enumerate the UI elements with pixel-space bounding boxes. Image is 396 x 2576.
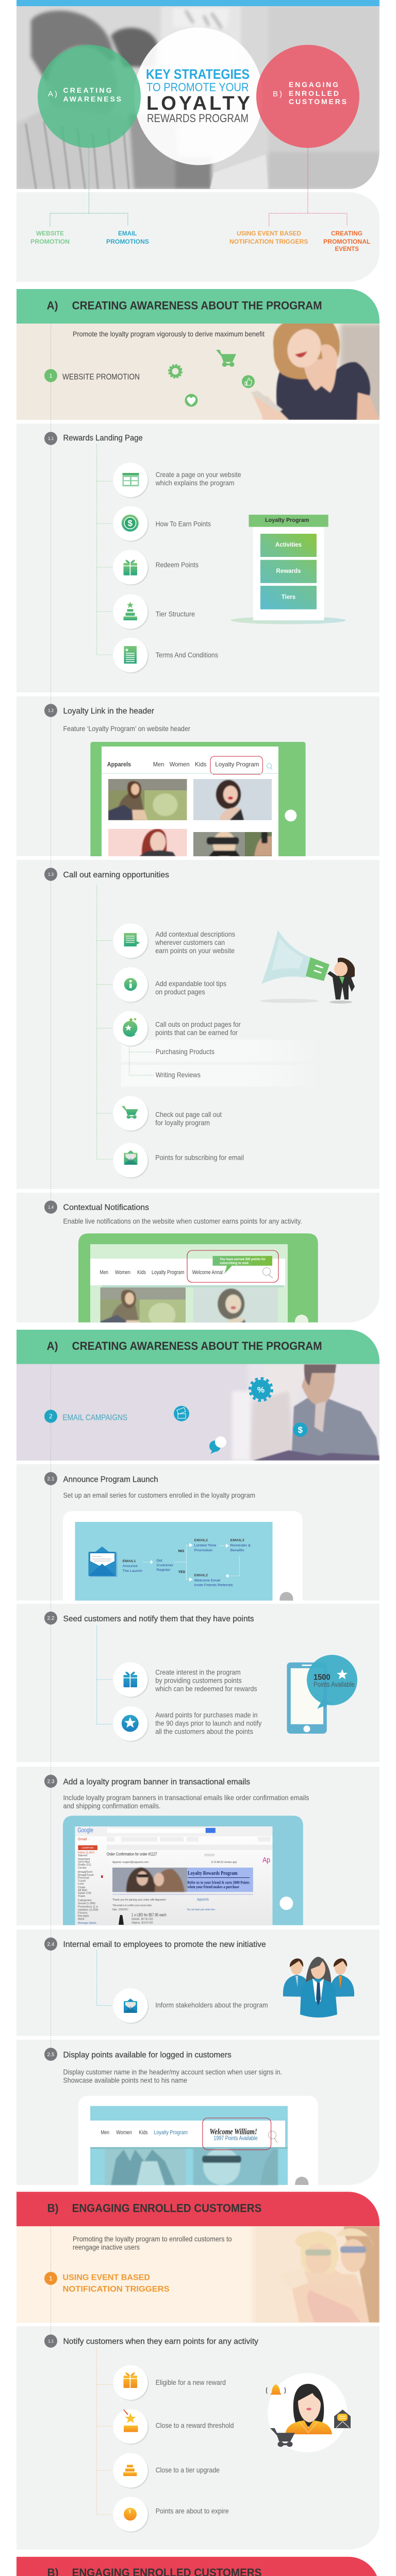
- gmail sidebar: Important: [78, 1858, 90, 1861]
- panel: 2.5 display points: [16, 2040, 380, 2185]
- flow step: email 2 promotion: EMAIL2: [194, 1539, 208, 1543]
- nav bar: Men: [100, 1269, 108, 1276]
- flow step: email 1: [123, 1560, 142, 1573]
- flow step: did customer register: Did: [157, 1559, 162, 1563]
- gmail sidebar: Personal: [78, 1877, 89, 1880]
- marker: 2 email campaigns: 2: [49, 1413, 53, 1420]
- item: check out: [113, 1096, 222, 1131]
- text: promote vigorously: Promote the loyalty program vigorously to derive maximum benefit: [73, 330, 265, 338]
- gmail sidebar: Work: [78, 1918, 85, 1921]
- flow step: email 1: Anounce: [123, 1565, 138, 1568]
- email body: 1 x LBD for $57.95 each: [131, 1912, 167, 1917]
- marker: 2.2: 2.2: [47, 1616, 55, 1621]
- loyalty banner: [112, 1868, 253, 1895]
- tablet mockup: gmail: COMPOSE: [81, 1846, 94, 1849]
- marker: 1.2: [44, 704, 57, 717]
- title: LOYALTY: [146, 93, 250, 114]
- item: tier upgrade: [113, 2453, 220, 2488]
- email body: This email is to confirm your recent order.: [112, 1904, 152, 1907]
- flow step: email 1: EMAIL1: [123, 1560, 136, 1563]
- icon: cart: [216, 350, 236, 367]
- gmail sidebar: Circles: [78, 1867, 87, 1870]
- flow step: email 2 promotion: [194, 1539, 217, 1552]
- loyalty banner: Loyalty Rewards Program: [188, 1871, 238, 1876]
- photo: man at desk: [232, 1364, 380, 1461]
- sub-item bands: [121, 1040, 320, 1087]
- flow labels: no / yes: NO: [178, 1550, 184, 1553]
- description: [63, 1793, 309, 1810]
- gmail sidebar: Starred: [78, 1854, 87, 1857]
- section header: A creating awareness (email): A): [47, 1340, 58, 1352]
- item: create a page: which explains the program: [155, 479, 234, 487]
- description: Promoting the loyalty program to enrolled customers to: [73, 2235, 232, 2243]
- illustration: phone with points bubble: [287, 1655, 357, 1734]
- panel: hero: [16, 6, 380, 189]
- email body: Shipping : $10.00 USD: [131, 1921, 153, 1924]
- flow step: email 2 welcome: [194, 1573, 233, 1587]
- item: call outs: Call outs on product pages for: [155, 1020, 241, 1028]
- label: website promotion: PROMOTION: [30, 238, 70, 245]
- item: tool tips: Add expandable tool tips: [155, 979, 226, 988]
- flow step: email 1: The Launch: [123, 1569, 142, 1573]
- illustration: woman with notifications: [266, 2373, 351, 2452]
- panel: 2.4 internal email: [16, 1929, 380, 2036]
- notification bubble: [187, 1250, 278, 1282]
- label: creating promotional events: PROMOTIONAL: [323, 238, 370, 245]
- hero photo: couple in grayscale: [16, 6, 380, 189]
- title: [146, 66, 250, 125]
- nav bar: Apparels: [107, 761, 131, 768]
- photo: woman with phone: [251, 324, 380, 420]
- envelope: [334, 2410, 351, 2428]
- gmail sidebar: Spam (19): [78, 1892, 91, 1895]
- flow step: email 3: Benefits: [230, 1549, 244, 1552]
- gmail sidebar: [78, 1851, 98, 1925]
- heading: Seed customers and notify them that they have points: [63, 1615, 254, 1623]
- marker: 2.4: 2.4: [47, 1942, 55, 1947]
- label: event based triggers: USING EVENT BASED: [237, 230, 301, 237]
- title: REWARDS PROGRAM: [147, 112, 249, 125]
- marker: 1.1 notify: [44, 2334, 57, 2348]
- gmail sidebar: [Imap]/Trash: [78, 1874, 94, 1877]
- loyalty banner: Refer us to your friend & earn 2000 Points: [187, 1880, 250, 1885]
- nav bar: [102, 756, 278, 774]
- description: and shipping confirmation emails.: [63, 1802, 161, 1810]
- notification bubble: You have earned 200 points for: [220, 1258, 266, 1261]
- label: event based triggers: [229, 230, 308, 245]
- item: create interest: Create interest in the program: [155, 1668, 241, 1676]
- connector tree: [97, 444, 112, 655]
- illustration: phone with points bubble: Points Available: [314, 1680, 355, 1688]
- item: award points: the 90 days prior to launch and notify: [155, 1719, 261, 1727]
- section header: A creating awareness: A): [47, 299, 58, 312]
- flow step: email 2 welcome: EMAIL2: [194, 1573, 208, 1577]
- item: redeem points: [113, 550, 199, 585]
- gmail sidebar: All Mail: [78, 1889, 87, 1892]
- heading: Announce Program Launch: [63, 1476, 158, 1484]
- top blue band: [16, 0, 380, 6]
- marker: 1.2: 1.2: [48, 708, 54, 713]
- item: reward threshold: [113, 2409, 234, 2445]
- red circle: engaging enrolled customers: ENGAGING: [289, 80, 338, 89]
- nav bar: [100, 1267, 273, 1278]
- icon: percent burst: [250, 1379, 272, 1400]
- welcome callout: 1997 Points Available: [213, 2136, 258, 2142]
- marker: 2.4: [44, 1938, 57, 1951]
- gmail sidebar: [Imap]/Sent: [78, 1871, 93, 1874]
- description: Set up an email series for customers enrolled in the loyalty program: [63, 1491, 255, 1499]
- gmail sidebar: Travel: [78, 1880, 86, 1883]
- email body: Apparels: [197, 1898, 209, 1902]
- tablet mockup: [90, 742, 306, 858]
- green circle: creating awareness: [38, 45, 141, 148]
- heading: Loyalty Link in the header: [63, 707, 155, 716]
- gmail sidebar: Less: [78, 1883, 84, 1886]
- marker: 2.2: [44, 1612, 57, 1624]
- panel: 1.3 call out earning opportunities: [16, 860, 380, 1189]
- item: create interest: by providing customers points: [155, 1676, 242, 1685]
- heading: Rewards Landing Page: [63, 434, 143, 443]
- tablet mockup: [78, 1233, 318, 1331]
- card: loyalty program mockup: Rewards: [276, 568, 301, 574]
- marker: 2.5: 2.5: [47, 2052, 55, 2058]
- email body: Subtotal : $57.95 USD: [131, 1918, 153, 1921]
- tablet mockup: gmail: Google: [77, 1826, 93, 1834]
- item: how to earn points: [113, 506, 211, 542]
- welcome callout: [203, 2118, 271, 2150]
- red circle: engaging enrolled customers: ENROLLED: [289, 89, 339, 97]
- item: contextual descriptions: Add contextual descriptions: [155, 930, 235, 938]
- description: Enable live notifications on the website when customer earns points for any activity.: [63, 1217, 302, 1225]
- connector: [97, 1950, 112, 2006]
- nav bar: Loyalty Program: [215, 761, 259, 768]
- section header: B engaging enrolled customers (events): [16, 2557, 380, 2576]
- marker: 1.1: [44, 432, 57, 445]
- timeline: [51, 324, 52, 2576]
- flow step: email 2 welcome: Welcome Email: [194, 1579, 221, 1582]
- flow step: email 2 promotion: Promotion: [194, 1549, 212, 1552]
- item: create a page: [113, 463, 241, 498]
- item: call outs: points that can be earned for: [155, 1028, 238, 1037]
- nav bar: Women: [170, 761, 190, 768]
- item: how to earn points: $: [128, 518, 133, 528]
- section header: B engaging enrolled customers: [16, 2192, 380, 2226]
- gmail sidebar: Promotions (1,4: [78, 1906, 98, 1909]
- sub-item: writing reviews: Writing Reviews: [156, 1071, 201, 1079]
- item: check out: for loyalty program: [155, 1118, 210, 1127]
- envelope: [89, 1547, 118, 1577]
- label: website promotion: WEBSITE: [36, 230, 64, 237]
- nav bar: Men: [153, 761, 164, 768]
- label: event based triggers: NOTIFICATION TRIGGERS: [229, 238, 308, 245]
- section header: A creating awareness: [16, 289, 380, 324]
- label: email promotions: [106, 230, 149, 245]
- marker: 1.4: [44, 1200, 57, 1214]
- nav bar: Men: [101, 2129, 109, 2136]
- illustration: phone with points bubble: 1500: [314, 1673, 331, 1682]
- card: loyalty program mockup: Activities: [275, 542, 302, 548]
- icon: cards: [174, 1406, 189, 1421]
- heading: event based triggers: NOTIFICATION TRIGGERS: [63, 2285, 170, 2294]
- nav bar: Women: [115, 1269, 130, 1276]
- flow step: email 3: EMAIL3: [230, 1539, 244, 1543]
- tablet mockup: gmail: [63, 1816, 303, 1925]
- nav bar: Kids: [137, 1269, 146, 1276]
- flow step: did customer register: [157, 1559, 174, 1572]
- tablet mockup: email flow: [63, 1511, 303, 1601]
- connector tree: [97, 1625, 112, 1724]
- panel: 2.3 transactional email banner: [16, 1767, 380, 1925]
- marker: 2.3: [44, 1775, 57, 1788]
- icon: dollar: $: [298, 1425, 303, 1435]
- gmail sidebar: Chats: [78, 1886, 86, 1889]
- flow step: email 2 promotion: Limited Time: [194, 1544, 217, 1548]
- marker: 1 event triggers: 1: [49, 2275, 53, 2282]
- item: subscribing: Points for subscribing for email: [155, 1154, 244, 1162]
- heading: event based triggers: USING EVENT BASED: [63, 2274, 150, 2282]
- nav bar: Kids: [195, 761, 207, 768]
- item: inform stakeholders: [113, 1988, 268, 2024]
- label: creating promotional events: [323, 230, 370, 252]
- section header: A creating awareness: CREATING AWARENESS ABOUT THE PROGRAM: [72, 299, 322, 312]
- connector: engaging branches: [269, 148, 347, 226]
- description: reengage inactive users: [73, 2243, 140, 2251]
- green circle: creating awareness: AWARENESS: [63, 95, 121, 103]
- heading: Contextual Notifications: [63, 1204, 149, 1212]
- item: create a page: Create a page on your website: [156, 470, 241, 479]
- email body: [107, 1852, 270, 1925]
- flow arrows: [143, 1543, 239, 1582]
- nav bar: Welcome Anna!: [192, 1269, 223, 1276]
- nav bar: Kids: [139, 2129, 148, 2136]
- sub-item: purchasing products: Purchasing Products: [156, 1047, 214, 1056]
- green circle: creating awareness: A): [48, 90, 57, 98]
- gmail sidebar: Receipts: [78, 1915, 89, 1918]
- section header: A creating awareness (email): CREATING AWARENESS ABOUT THE PROGRAM: [72, 1340, 322, 1352]
- marker: 2.3: 2.3: [47, 1779, 55, 1785]
- description: Feature ‘Loyalty Program’ on website header: [63, 724, 190, 733]
- panel: 1.1 notify customers: [16, 2326, 380, 2550]
- icon: thumbs up: [242, 375, 255, 388]
- email body: Thank you for placing your order with Apparels!: [112, 1899, 166, 1902]
- marker: 1.1 notify: 1.1: [48, 2339, 54, 2344]
- marker: 1 website promotion: 1: [49, 373, 53, 379]
- tablet mockup: points display: [78, 2096, 318, 2185]
- item: eligible: Eligible for a new reward: [156, 2378, 226, 2386]
- item: tier structure: [113, 595, 195, 630]
- icon: chat bubbles: [209, 1436, 226, 1454]
- cart: [270, 2428, 295, 2447]
- item: expire: [113, 2497, 229, 2533]
- gmail sidebar: Manage labels: [78, 1922, 96, 1925]
- item: contextual descriptions: earn points on your website: [155, 946, 235, 955]
- flow labels: no / yes: [178, 1550, 186, 1574]
- illustration: three colleagues: [283, 1957, 354, 2018]
- flow step: did customer register: Register: [157, 1568, 171, 1572]
- description: Include loyalty program banners in transactional emails like order confirmation emails: [63, 1793, 309, 1802]
- email body: Order Confirmation for order #1127: [107, 1852, 157, 1857]
- label: creating promotional events: CREATING: [331, 230, 362, 237]
- flow step: did customer register: Customer: [157, 1564, 174, 1567]
- flow step: email 3: Reminder &: [230, 1544, 251, 1548]
- panel: website promotion: [16, 319, 387, 420]
- icon: gear: [169, 365, 182, 378]
- loyalty banner: when your friend makes a purchase: [187, 1885, 239, 1889]
- marker: 1.3: 1.3: [48, 872, 54, 877]
- marker: 2 email campaigns: [44, 1410, 57, 1423]
- heading: Add a loyalty program banner in transactional emails: [63, 1777, 250, 1786]
- item: terms and conditions: [113, 638, 218, 673]
- item: check out: Check out page call out: [155, 1110, 222, 1118]
- item: reward threshold: Close to a reward threshold: [156, 2421, 234, 2430]
- red circle: engaging enrolled customers: CUSTOMERS: [289, 97, 346, 106]
- item: how to earn points: How To Earn Points: [156, 520, 211, 528]
- title: KEY STRATEGIES: [146, 66, 250, 82]
- icon: dollar: [293, 1422, 307, 1437]
- nav bar: [101, 2129, 277, 2143]
- panel: 1.1 rewards landing page: [16, 423, 380, 692]
- panel: overview of strategies: [16, 148, 380, 282]
- item: award points: Award points for purchases made in: [155, 1710, 258, 1719]
- marker: 1 website promotion: [44, 369, 57, 382]
- item: create interest: which can be redeemed for rewards: [155, 1685, 257, 1693]
- green circle: creating awareness: CREATING: [63, 86, 112, 94]
- marker: 2.5: [44, 2048, 57, 2061]
- marker: 1.1: 1.1: [48, 436, 54, 441]
- icon: percent burst: %: [257, 1386, 265, 1395]
- panel: 1.4 contextual notifications: [16, 1193, 380, 1331]
- item: tier upgrade: Close to a tier upgrade: [156, 2466, 220, 2474]
- gmail sidebar: Inbox (1,467): [78, 1851, 95, 1854]
- email body: Ap: [262, 1856, 270, 1865]
- gmail sidebar: Categories: [78, 1899, 92, 1902]
- panel: 2.2 seed customers: [16, 1604, 380, 1762]
- label: creating promotional events: EVENTS: [335, 245, 359, 252]
- heading: Notify customers when they earn points for any activity: [63, 2337, 258, 2346]
- heading: email campaigns: EMAIL CAMPAIGNS: [63, 1414, 127, 1422]
- gmail sidebar: Forums: [78, 1912, 88, 1915]
- gmail sidebar: Drafts (11): [78, 1863, 91, 1867]
- white title circle: [134, 28, 263, 165]
- email body: You can track your order here.: [187, 1908, 216, 1911]
- card: loyalty program mockup: Tiers: [282, 595, 295, 601]
- illustration: businessman with megaphone: [260, 930, 355, 1004]
- description: [73, 2235, 232, 2251]
- nav bar: Women: [116, 2129, 132, 2136]
- connector tree: [97, 2348, 112, 2515]
- email body: Apparels <support@zapparels.com>: [112, 1861, 149, 1864]
- item: call outs: [113, 1011, 241, 1047]
- tablet mockup: gmail: Gmail: [78, 1838, 87, 1841]
- connector tree: [97, 885, 154, 1159]
- email body: Date : 9/26/2017: [112, 1908, 128, 1911]
- item: terms and conditions: Terms And Conditions: [156, 651, 218, 659]
- item: award points: all the customers about the points: [155, 1727, 253, 1735]
- label: email promotions: PROMOTIONS: [106, 238, 149, 245]
- nav bar: Loyalty Program: [154, 2129, 188, 2136]
- marker: 1.3: [44, 868, 57, 881]
- description: Display customer name in the header/my account section when user signs in.: [63, 2068, 282, 2076]
- item: expire: Points are about to expire: [156, 2506, 229, 2515]
- nav bar: Loyalty Program: [152, 1269, 185, 1276]
- flow step: email 3: [230, 1539, 251, 1552]
- step markers: [44, 369, 57, 2576]
- heading: event based triggers: [63, 2274, 170, 2294]
- panel: 1.2 loyalty link in the header: [16, 697, 380, 858]
- description: [63, 2068, 282, 2084]
- marker: 1 event triggers: [44, 2272, 57, 2285]
- product photos: [100, 1287, 278, 1331]
- flow step: email 2 welcome: Invite Friends Referrals: [194, 1584, 233, 1587]
- gmail sidebar: Sent Mail: [78, 1861, 90, 1864]
- product photos: [108, 779, 272, 858]
- item: subscribing: [113, 1143, 244, 1179]
- label: website promotion: [30, 230, 70, 245]
- item: eligible: [113, 2365, 226, 2401]
- bell: [266, 2384, 286, 2395]
- item: tier structure: Tier Structure: [156, 610, 195, 618]
- marker: 2.1: 2.1: [47, 1477, 55, 1482]
- section header: A creating awareness (email): [16, 1330, 380, 1364]
- icon: heart: [185, 394, 198, 407]
- notification bubble: subscribing to mail.: [220, 1261, 249, 1265]
- heading: Call out earning opportunities: [63, 871, 169, 879]
- item: create interest: [113, 1662, 257, 1698]
- item: contextual descriptions: [113, 923, 235, 959]
- panel: 2.1 announce program launch: [16, 1464, 380, 1601]
- item: award points: [113, 1706, 261, 1742]
- welcome callout: Welcome William!: [209, 2128, 257, 2137]
- tinted photos: [105, 2147, 278, 2185]
- red circle: engaging enrolled customers: [256, 45, 359, 148]
- panel: event based notification triggers: [16, 2221, 387, 2329]
- label: email promotions: EMAIL: [118, 230, 137, 237]
- gmail sidebar: Trash: [78, 1895, 85, 1898]
- item: tool tips: [113, 968, 226, 1003]
- gmail sidebar: Social (1,289): [78, 1902, 95, 1905]
- red circle: engaging enrolled customers: B): [273, 90, 282, 98]
- connector: awareness branches: [50, 148, 128, 226]
- heading: website promotion: WEBSITE PROMOTION: [62, 373, 140, 382]
- flow labels: no / yes: YES: [178, 1570, 186, 1574]
- card: loyalty program mockup: [231, 515, 345, 624]
- item: inform stakeholders: Inform stakeholders about the program: [155, 2001, 268, 2009]
- photo: two friends selfie: [252, 2226, 380, 2323]
- section header: B engaging enrolled customers: ENGAGING ENROLLED CUSTOMERS: [72, 2201, 261, 2214]
- marker: 1.4: 1.4: [48, 1205, 54, 1210]
- gmail sidebar: Updates (3,269): [78, 1909, 98, 1912]
- heading: Display points available for logged in customers: [63, 2050, 232, 2059]
- email body: 11:15 AM (51 minutes ago): [211, 1861, 237, 1864]
- card: loyalty program mockup: Loyalty Program: [265, 517, 309, 523]
- item: redeem points: Redeem Points: [156, 561, 199, 569]
- heading: Internal email to employees to promote the new initiative: [63, 1940, 266, 1949]
- panel: email campaigns: [16, 1360, 387, 1463]
- item: tool tips: on product pages: [155, 988, 205, 996]
- description: Showcase available points next to his name: [63, 2076, 187, 2084]
- title: TO PROMOTE YOUR: [146, 80, 249, 94]
- item: contextual descriptions: wherever customers can: [155, 938, 225, 946]
- marker: 2.1: [44, 1472, 57, 1485]
- section header: B engaging enrolled customers: B): [47, 2201, 59, 2214]
